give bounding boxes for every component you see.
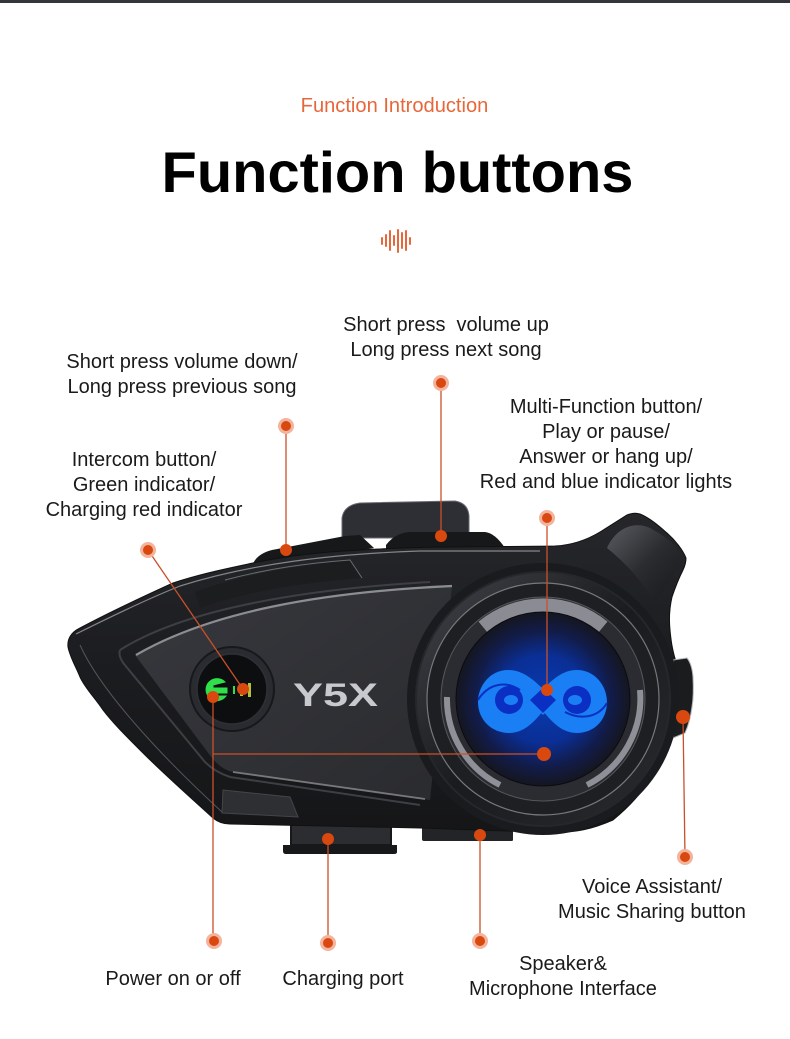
panel rim bbox=[120, 582, 430, 805]
label: intercom button bbox=[46, 449, 243, 521]
label: multi-function button: Multi-Function button/ bbox=[510, 396, 703, 418]
headset device bbox=[68, 501, 693, 854]
speaker interface bbox=[422, 825, 513, 841]
label: voice assistant: Voice Assistant/ bbox=[582, 876, 722, 898]
inner panel bbox=[135, 586, 452, 800]
annotation leader lines bbox=[148, 383, 685, 943]
label: volume up: Long press next song bbox=[350, 339, 542, 361]
label: voice assistant: Music Sharing button bbox=[558, 901, 746, 923]
helmet clip bbox=[342, 501, 469, 542]
label: multi-function button: Play or pause/ bbox=[542, 421, 670, 443]
main body shell bbox=[68, 513, 686, 832]
label: volume up bbox=[343, 314, 549, 361]
label: intercom button: Charging red indicator bbox=[46, 499, 243, 521]
label: volume down: Short press volume down/ bbox=[66, 351, 298, 373]
top slot bbox=[195, 560, 362, 608]
label: volume down bbox=[66, 351, 298, 398]
charging port bbox=[283, 820, 397, 854]
hump highlight bbox=[607, 525, 682, 602]
label: multi-function button: Red and blue indicator lights bbox=[480, 471, 732, 493]
top volume-down button bbox=[252, 535, 374, 566]
label: volume up: Short press volume up bbox=[343, 314, 549, 336]
eyebrow heading: Function Introduction bbox=[301, 95, 488, 117]
label: intercom button: Intercom button/ bbox=[72, 449, 217, 471]
label: multi-function button: Answer or hang up/ bbox=[519, 446, 693, 468]
side button bbox=[673, 658, 693, 738]
outer ring bbox=[407, 563, 679, 835]
intercom button bbox=[190, 647, 274, 731]
brand mark: Y5X bbox=[293, 677, 379, 713]
icon: sound wave bbox=[382, 230, 410, 252]
label: speaker and microphone bbox=[469, 953, 657, 1000]
lower-left shell edge bbox=[80, 645, 222, 812]
panel highlight bbox=[136, 586, 452, 655]
top dark strip bbox=[0, 0, 790, 3]
label: speaker and microphone: Microphone Interface bbox=[469, 978, 657, 1000]
label: voice assistant bbox=[558, 876, 746, 923]
label: intercom button: Green indicator/ bbox=[73, 474, 216, 496]
icon: green indicator bbox=[206, 679, 227, 701]
label: charging port: Charging port bbox=[282, 968, 404, 990]
top volume-up button bbox=[386, 532, 505, 550]
blue face bbox=[456, 612, 630, 786]
bevel highlights bbox=[447, 605, 640, 785]
label: multi-function button bbox=[480, 396, 732, 493]
icon: blue infinity logo bbox=[478, 670, 607, 733]
bottom slot bbox=[222, 790, 298, 817]
label: power: Power on or off bbox=[105, 968, 241, 990]
annotation dots bbox=[140, 375, 693, 951]
shell highlight bbox=[76, 551, 540, 634]
label: volume down: Long press previous song bbox=[67, 376, 297, 398]
label: speaker and microphone: Speaker& bbox=[519, 953, 608, 975]
title: Function buttons bbox=[162, 141, 633, 205]
